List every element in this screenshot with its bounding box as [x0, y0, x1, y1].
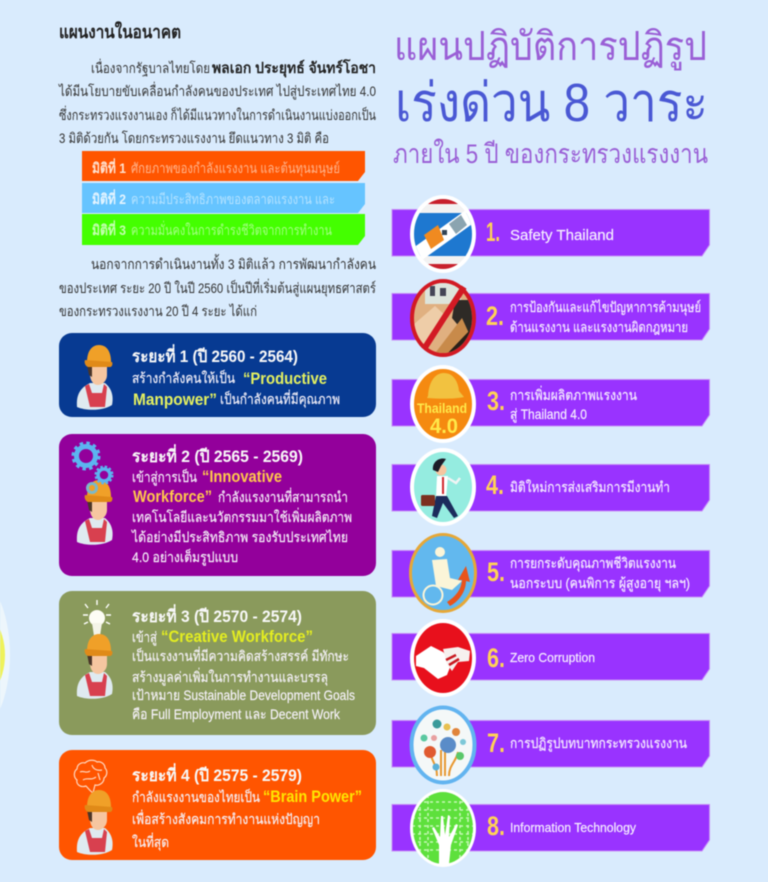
- phase 2 text: Workforce”: [133, 487, 212, 506]
- number 2: 2.: [486, 301, 504, 331]
- phase 4 text: “Brain Power”: [263, 787, 362, 806]
- dimension 3 bar: ความมั่นคงในการดำรงชีวิตจากการทำงาน: [131, 221, 332, 238]
- heading: future work plan: แผนงานในอนาคต: [59, 21, 181, 42]
- phase 3 text: [132, 604, 355, 722]
- icon: worker: [77, 345, 113, 410]
- title line 2: เร่งด่วน 8 วาระ: [395, 73, 708, 133]
- agenda 1 banner: [392, 195, 710, 273]
- number 5: 5.: [487, 557, 505, 587]
- dimension 2 bar: [82, 183, 365, 213]
- dimension 2 bar: ความมีประสิทธิภาพของตลาดแรงงาน และ: [131, 191, 335, 207]
- label 3: สู่ Thailand 4.0: [510, 406, 587, 423]
- phase 1 text: ระยะที่ 1 (ปี 2560 - 2564): [132, 344, 298, 366]
- panel: phase 3: [59, 591, 376, 735]
- agenda 5 banner: [392, 534, 710, 612]
- phase 2 text: “Innovative: [202, 467, 282, 486]
- phase 3 text: เป้าหมาย Sustainable Development Goals: [132, 687, 355, 703]
- title line 1: แผนปฏิบัติการปฏิรูป: [394, 25, 707, 70]
- icon: technology tree: [412, 708, 474, 782]
- label 2: การป้องกันและแก้ไขปัญหาการค้ามนุษย์: [510, 299, 701, 316]
- phase 1 text: “Productive: [243, 369, 327, 388]
- agenda 8 banner: [392, 789, 710, 867]
- phase 1 text: เป็นกำลังคนที่มีคุณภาพ: [220, 390, 340, 408]
- icon: worker: [77, 634, 113, 699]
- phase 4 text: ระยะที่ 4 (ปี 2575 - 2579): [132, 763, 302, 785]
- intro paragraph: ซึ่งกระทรวงแรงงานเอง ก็ได้มีแนวทางในการดำเนินงานแบ่งออกเป็น: [59, 106, 376, 123]
- icon: prohibited labour: [410, 279, 476, 358]
- number 1: 1.: [486, 217, 500, 247]
- label 8: Information Technology: [510, 820, 636, 835]
- icon: worker: [77, 480, 113, 545]
- agenda 4 banner: [392, 448, 710, 526]
- number 7: 7.: [487, 728, 505, 758]
- second paragraph: ของประเทศ ระยะ 20 ปี ในปี 2560 เป็นปีที่เริ่มต้นสู่แผนยุทธศาสตร์: [59, 279, 376, 297]
- phase 2 text: 4.0 อย่างเต็มรูปแบบ: [132, 548, 238, 566]
- label 2: ด้านแรงงาน และแรงงานผิดกฎหมาย: [510, 319, 688, 335]
- intro paragraph: ได้มีนโยบายขับเคลื่อนกำลังคนของประเทศ ไปสู่ประเทศไทย 4.0: [58, 82, 376, 100]
- agenda 2 banner: [392, 279, 710, 358]
- icon: light bulb: [83, 600, 111, 636]
- dimension 3 bar: [82, 214, 365, 245]
- decorative yellow glow at left edge: [0, 575, 10, 735]
- panel: phase 4: [59, 750, 376, 860]
- phase 3 text: คือ Full Employment และ Decent Work: [132, 706, 341, 722]
- dimension 3 bar: มิติที่ 3: [92, 220, 126, 238]
- label 4: มิติใหม่การส่งเสริมการมีงานทำ: [510, 479, 670, 495]
- panel: phase 1: [59, 333, 376, 417]
- icon: Thailand 4.0 helmet: [410, 365, 476, 443]
- phase 4 text: เพื่อสร้างสังคมการทำงานแห่งปัญญา: [132, 810, 320, 827]
- label 3: [510, 386, 637, 423]
- label 5: [510, 555, 690, 592]
- phase 4 text: กำลังแรงงานของไทยเป็น: [132, 788, 260, 805]
- phase 2 text: [131, 444, 352, 566]
- phase 3 text: สร้างมูลค่าเพิ่มในการทำงานและบรรลุ: [132, 668, 328, 686]
- label 7: การปฏิรูปบทบาทกระทรวงแรงงาน: [510, 735, 687, 752]
- second paragraph: นอกจากการดำเนินงานทั้ง 3 มิติแล้ว การพัฒนากำลังคน: [91, 254, 376, 272]
- number 3: 3.: [487, 386, 505, 416]
- label 5: นอกระบบ (คนพิการ ผู้สูงอายุ ฯลฯ): [510, 575, 690, 592]
- phase 2 text: เทคโนโลยีและนวัตกรรมมาใช้เพิ่มผลิตภาพ: [132, 508, 352, 525]
- phase 4 text: [132, 763, 362, 851]
- title line 3: ภายใน 5 ปี ของกระทรวงแรงงาน: [393, 138, 708, 169]
- phase 4 text: ในที่สุด: [132, 833, 169, 851]
- second paragraph: [59, 254, 376, 319]
- intro paragraph: พลเอก ประยุทธ์ จันทร์โอชา: [212, 58, 376, 78]
- icon: hand over green circuitry: [410, 789, 476, 867]
- icon: wheelchair and rising arrow: [410, 534, 476, 612]
- label 3: การเพิ่มผลิตภาพแรงงาน: [510, 386, 637, 403]
- phase 3 text: “Creative Workforce”: [161, 627, 313, 646]
- intro paragraph: [58, 58, 376, 146]
- second paragraph: ของกระทรวงแรงงาน 20 ปี 4 ระยะ ได้แก่: [59, 303, 257, 319]
- phase 3 text: เป็นแรงงานที่มีความคิดสร้างสรรค์ มีทักษะ: [132, 647, 349, 664]
- agenda 7 banner: [392, 708, 710, 782]
- label 6: Zero Corruption: [510, 650, 595, 665]
- dimension 1 bar: ศักยภาพของกำลังแรงงาน และต้นทุนมนุษย์: [131, 160, 340, 177]
- icon: Thailand 4.0 helmet: Thailand: [417, 400, 467, 416]
- icon: handshake with money: [410, 619, 476, 697]
- icon: gears: [73, 443, 112, 492]
- dimension 1 bar: [82, 151, 365, 181]
- intro paragraph: 3 มิติด้วยกัน โดยกระทรวงแรงงาน ยึดแนวทาง 3 มิติ คือ: [59, 130, 329, 146]
- label 5: การยกระดับคุณภาพชีวิตแรงงาน: [510, 555, 676, 572]
- number 8: 8.: [487, 811, 505, 841]
- label 1: Safety Thailand: [510, 227, 614, 244]
- number 6: 6.: [487, 643, 505, 673]
- intro paragraph: เนื่องจากรัฐบาลไทยโดย: [91, 59, 210, 77]
- icon: businessman walking: [410, 448, 476, 526]
- icon: brain outline: [74, 760, 107, 793]
- phase 2 text: ระยะที่ 2 (ปี 2565 - 2569): [132, 444, 303, 466]
- icon: Thailand 4.0 helmet: 4.0: [430, 415, 458, 438]
- agenda 6 banner: [392, 619, 710, 697]
- agenda 3 banner: [392, 365, 710, 443]
- icon: seat belt on Thai flag: [410, 195, 476, 273]
- phase 1 text: Manpower”: [133, 390, 217, 409]
- icon: worker: [77, 790, 113, 855]
- phase 1 text: สร้างกำลังคนให้เป็น: [132, 369, 235, 386]
- phase 3 text: ระยะที่ 3 (ปี 2570 - 2574): [132, 604, 302, 626]
- phase 2 text: กำลังแรงงานที่สามารถนำ: [218, 488, 348, 505]
- number 4: 4.: [486, 470, 504, 500]
- title block: [393, 25, 708, 169]
- panel: phase 2: [59, 434, 376, 576]
- dimension 2 bar: มิติที่ 2: [92, 189, 126, 207]
- phase 1 text: [132, 344, 340, 409]
- phase 2 text: ได้อย่างมีประสิทธิภาพ รองรับประเทศไทย: [131, 529, 348, 545]
- dimension 1 bar: มิติที่ 1: [92, 158, 126, 176]
- phase 2 text: เข้าสู่การเป็น: [132, 468, 197, 486]
- phase 3 text: เข้าสู่: [132, 629, 157, 646]
- label 2: [510, 299, 701, 335]
